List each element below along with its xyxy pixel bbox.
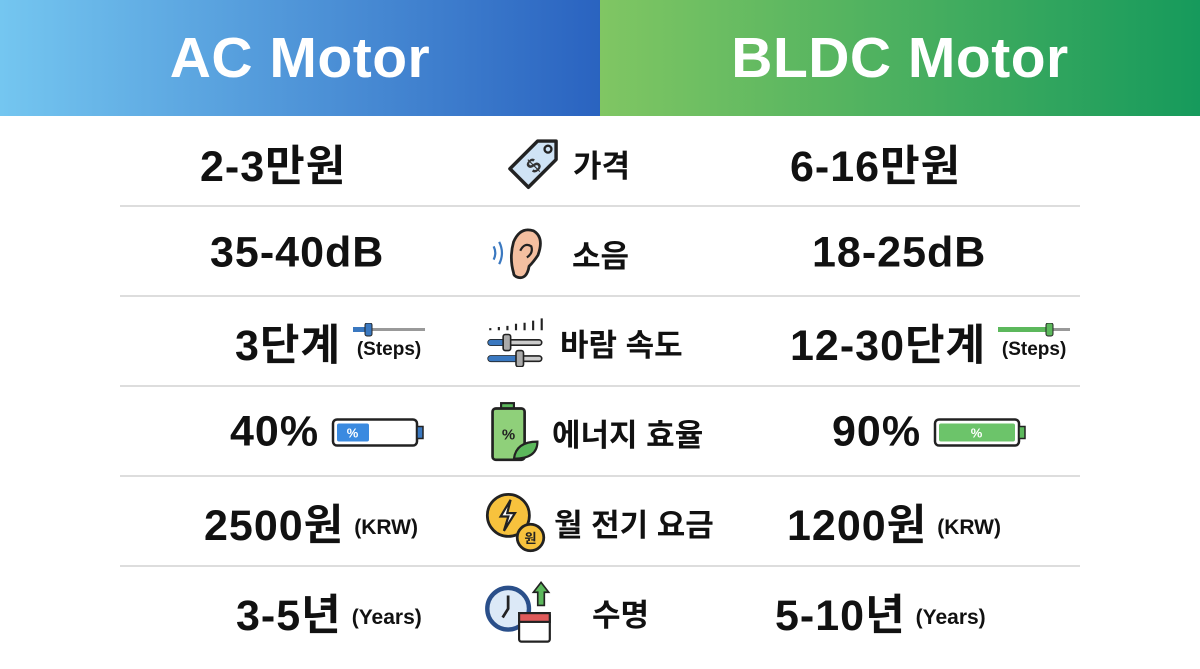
row efficiency: AC value: 40% [230,408,319,456]
row price: label: 가격 [573,148,630,184]
row noise: label: 소음 [572,238,629,274]
row price: AC value: 2-3만원 [200,143,346,191]
row price: label: $ [522,153,547,178]
row monthly cost: label [486,493,714,552]
row speed: BLDC value: 12-30단계 [790,322,986,370]
row noise: label [492,228,629,280]
row speed: AC value: (Steps) [357,339,421,360]
row speed: label [487,318,683,367]
row efficiency: AC value: % [347,425,359,440]
row monthly cost: BLDC value: (KRW) [937,516,1001,539]
row monthly cost: AC value [204,502,418,550]
row speed: AC value [235,322,425,370]
row noise: AC value: 35-40dB [210,228,384,276]
row lifespan: AC value: (Years) [352,606,422,629]
row speed: BLDC value: (Steps) [1002,339,1066,360]
row lifespan: BLDC value [775,592,986,640]
row noise: BLDC value: 18-25dB [812,228,986,276]
header: BLDC Motor: BLDC Motor [731,26,1069,90]
row monthly cost: label: 원 [524,531,537,546]
row monthly cost: AC value: 2500원 [204,502,344,550]
row speed: AC value: 3단계 [235,322,341,370]
header: AC Motor: AC Motor [170,26,430,90]
row lifespan: AC value [236,592,422,640]
row lifespan: label: 수명 [592,598,649,632]
row monthly cost: BLDC value: 1200원 [787,502,927,550]
row price: label [508,139,630,190]
row efficiency: label: 에너지 효율 [552,418,703,452]
row monthly cost: label: 월 전기 요금 [554,508,714,542]
row efficiency: AC value [230,408,424,456]
header: BLDC Motor [600,0,1200,116]
row lifespan: BLDC value: 5-10년 [775,592,906,640]
header: AC Motor [0,0,600,116]
row speed: label: 바람 속도 [560,328,683,362]
row lifespan: BLDC value: (Years) [916,606,986,629]
row efficiency: label: % [502,426,515,443]
row lifespan: label [485,581,649,643]
row efficiency: BLDC value: % [971,425,983,440]
row lifespan: AC value: 3-5년 [236,592,342,640]
row efficiency: BLDC value [832,408,1026,456]
row monthly cost: BLDC value [787,502,1001,550]
row monthly cost: AC value: (KRW) [354,516,418,539]
row efficiency: label [491,402,703,462]
row price: BLDC value: 6-16만원 [790,143,961,191]
row efficiency: BLDC value: 90% [832,408,921,456]
